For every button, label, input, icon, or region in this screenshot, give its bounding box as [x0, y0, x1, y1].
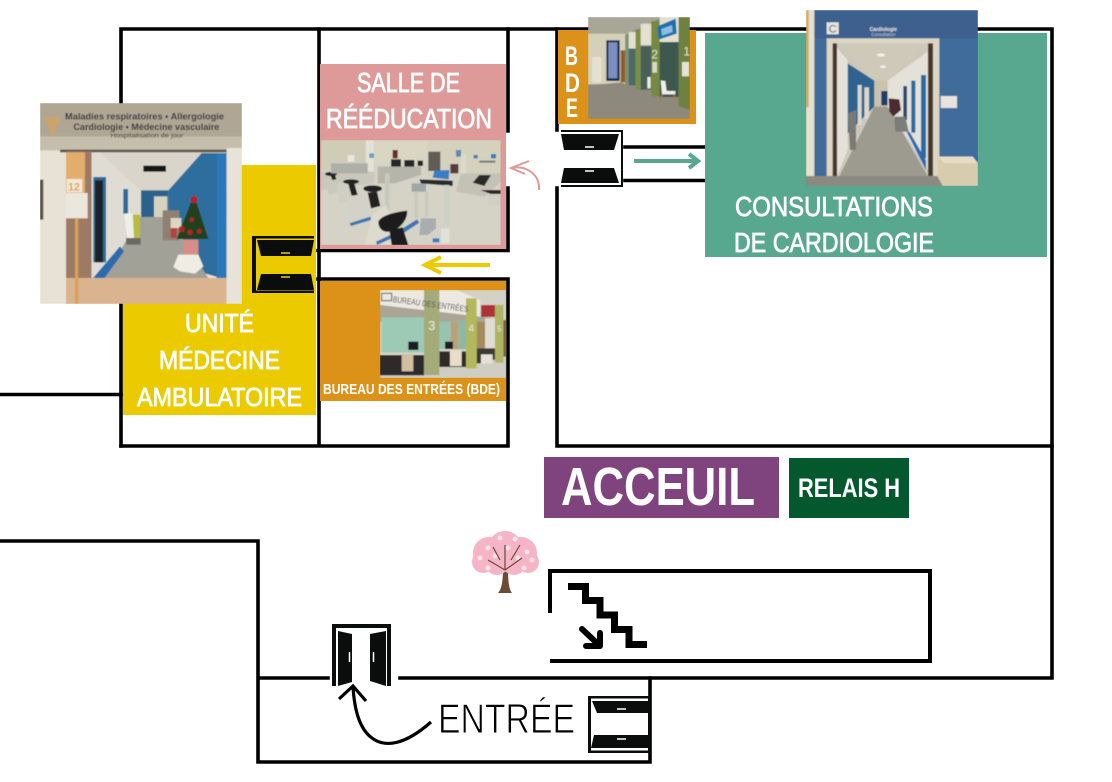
label: salle de rééducation	[326, 67, 492, 134]
label: unité médecine ambulatoire	[137, 308, 302, 412]
label: BDE: D	[565, 68, 580, 98]
label: consultations de cardiologie: CONSULTATIONS	[735, 191, 933, 222]
photo: rehabilitation room	[321, 140, 500, 245]
front bike	[364, 205, 401, 245]
photo: bureau des entrées counters: 4	[469, 323, 475, 334]
icon: cherry blossom tree	[472, 531, 539, 593]
door: consultations corridor	[561, 130, 623, 187]
label: unité médecine ambulatoire: AMBULATOIRE	[137, 382, 302, 412]
door: main entrance double door	[332, 624, 391, 686]
sign text: Maladies respiratoires • Allergologie	[65, 112, 224, 122]
photo: bureau des entrées counters	[380, 290, 506, 378]
label: BDE	[565, 41, 580, 123]
sign text	[65, 112, 224, 194]
sign text: C	[829, 23, 837, 35]
sign text: 12	[68, 182, 80, 194]
panel: consultations de cardiologie	[705, 33, 1047, 258]
heading: accueil: ACCEUIL	[561, 457, 755, 517]
photo: BDE waiting hall	[588, 17, 690, 119]
column numerals: 2	[651, 48, 658, 62]
grape logo	[45, 117, 60, 135]
console stations	[385, 173, 390, 210]
arrow: to unité médecine ambulatoire	[425, 257, 490, 273]
panel: bureau des entrées	[320, 281, 506, 401]
label: consultations de cardiologie: DE CARDIOLOGIE	[734, 227, 934, 258]
column numerals: 1	[683, 44, 690, 58]
arrow: to salle de rééducation	[511, 161, 539, 190]
panel: BDE	[558, 30, 696, 124]
label: unité médecine ambulatoire: UNITÉ	[185, 308, 254, 338]
door: unité médecine ambulatoire	[252, 236, 314, 293]
sign text: Hospitalisation de jour	[111, 133, 184, 140]
label: BDE: E	[566, 93, 578, 123]
label: consultations de cardiologie	[734, 191, 934, 258]
photo: hospitalisation de jour corridor	[40, 103, 242, 304]
photo: cardiology corridor: Consultation	[871, 32, 896, 37]
photo sign text: BUREAU DES ENTRÉES	[392, 294, 469, 314]
middle bike	[344, 194, 369, 224]
panel: unité médecine ambulatoire	[123, 165, 316, 415]
label: bureau des entrées: BUREAU DES ENTRÉES (BDE)	[323, 381, 500, 398]
column numerals	[651, 44, 690, 62]
label: salle de rééducation: SALLE DE	[357, 67, 460, 98]
panel: salle de rééducation	[320, 64, 506, 249]
arrow: entrance to main door	[339, 686, 431, 743]
label: salle de rééducation: RÉÉDUCATION	[326, 103, 492, 134]
label: relais H: RELAIS H	[798, 473, 900, 503]
arrow: to consultations de cardiologie	[634, 154, 698, 168]
photo: bureau des entrées counters: 5	[497, 324, 502, 333]
door: street entrance	[588, 696, 650, 753]
photo: cardiology corridor	[806, 10, 978, 186]
far bikes	[324, 173, 339, 195]
treadmills	[460, 153, 466, 190]
label: relais H	[789, 458, 909, 518]
photo: cardiology corridor: Cardiologie	[870, 27, 897, 33]
label: entrée: ENTRÉE	[438, 695, 575, 742]
photo: bureau des entrées counters: 3	[428, 318, 435, 333]
label: unité médecine ambulatoire: MÉDECINE	[159, 345, 280, 375]
icon: stairs going down	[568, 586, 647, 646]
label: BDE: B	[565, 41, 578, 71]
sign text: Cardiologie • Médecine vasculaire	[73, 122, 219, 132]
